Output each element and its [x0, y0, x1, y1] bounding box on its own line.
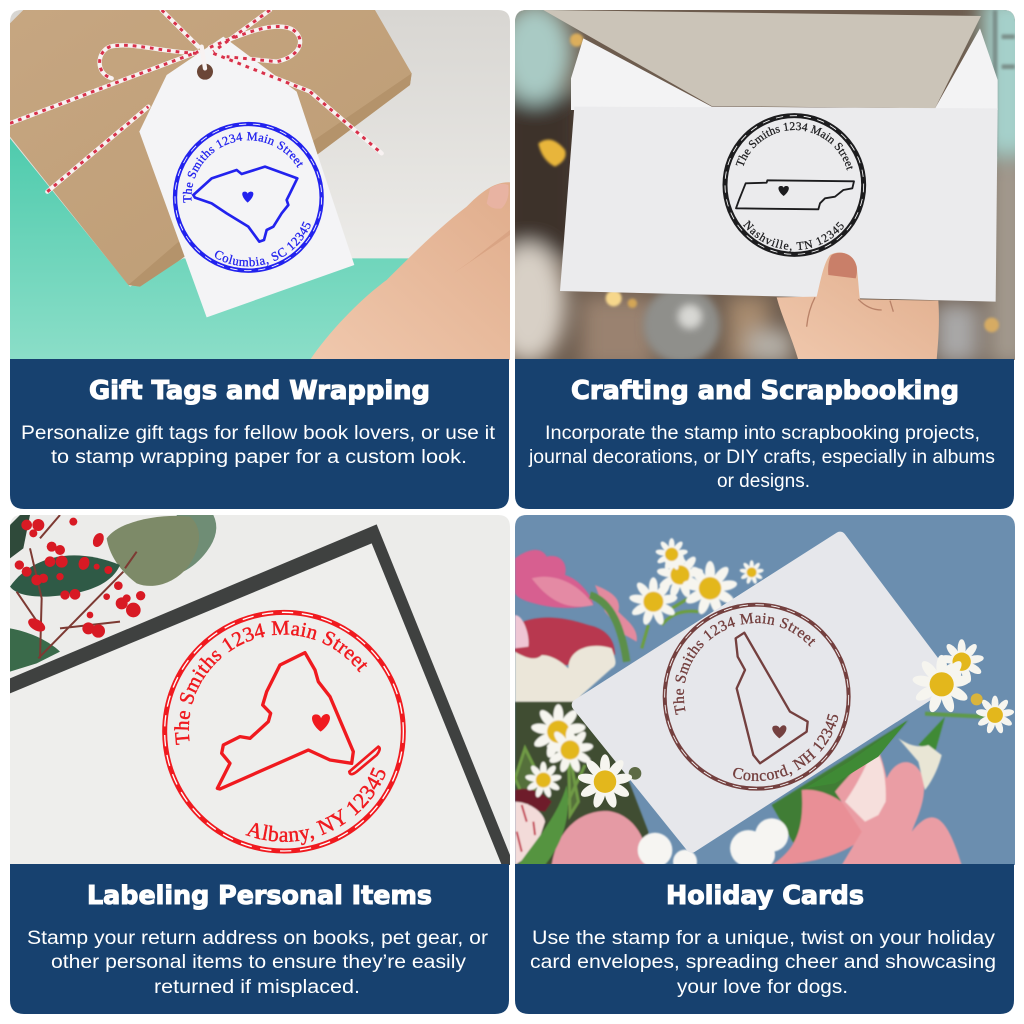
stamp: New York [162, 610, 406, 854]
photo: gift box with tag [10, 10, 510, 360]
stamp: South Carolina [172, 122, 324, 273]
caption bar [515, 359, 1014, 509]
eucalyptus and red flowers [10, 515, 216, 672]
panel: gift tags and wrapping [10, 10, 510, 509]
description: other personal items to ensure they’re easily [51, 952, 467, 973]
flowers behind card [515, 538, 992, 874]
book cover [10, 524, 510, 865]
lights [538, 10, 1015, 332]
description [27, 928, 489, 998]
daisies over card [577, 639, 1015, 809]
card [578, 538, 948, 847]
hand [777, 252, 939, 360]
panel: holiday cards [515, 515, 1015, 1014]
card hole [629, 767, 641, 780]
hand [310, 182, 510, 360]
description: your love for dogs. [677, 977, 848, 998]
stamp: Tennessee: Nashville, TN 12345 [743, 220, 844, 252]
caption bar [10, 359, 509, 509]
caption bar [10, 864, 509, 1014]
heading: Crafting and Scrapbooking [571, 376, 959, 406]
photo: card in bouquet [515, 515, 1015, 865]
heading: Holiday Cards [666, 881, 864, 911]
tag [139, 37, 354, 317]
stamp: South Carolina: The Smiths 1234 Main Street [182, 132, 303, 203]
tag hole [197, 64, 213, 80]
description: Stamp your return address on books, pet gear, or [27, 928, 489, 949]
envelope front [560, 107, 998, 302]
description [21, 423, 496, 468]
stamp: New Hampshire [662, 602, 851, 791]
stamp: Tennessee [722, 113, 866, 257]
photo: book with flowers [10, 515, 510, 865]
stamp: New York: Albany, NY 12345 [245, 767, 386, 846]
panel: labeling personal items [10, 515, 510, 1014]
stamp: South Carolina: Columbia, SC 12345 [214, 221, 311, 267]
description: journal decorations, or DIY crafts, especially in albums [528, 447, 995, 468]
heading: Labeling Personal Items [87, 881, 432, 911]
gift box [10, 10, 412, 287]
photo: envelope [515, 10, 1015, 360]
card insert [543, 10, 981, 108]
heading: Gift Tags and Wrapping [89, 376, 430, 406]
description: or designs. [717, 471, 810, 492]
description: Personalize gift tags for fellow book lovers, or use it [21, 423, 496, 444]
description [528, 423, 995, 492]
panel: crafting and scrapbooking [515, 10, 1015, 509]
envelope back flap [571, 28, 998, 110]
description: Incorporate the stamp into scrapbooking projects, [545, 423, 980, 444]
book page [10, 543, 502, 865]
twine bow [10, 10, 382, 192]
stamp: Tennessee: The Smiths 1234 Main Street [736, 122, 853, 170]
description: returned if misplaced. [154, 977, 360, 998]
description: card envelopes, spreading cheer and showcasing [530, 952, 996, 973]
stamp: New Hampshire: The Smiths 1234 Main Street [673, 612, 816, 715]
description [530, 928, 996, 998]
stamp: New York: The Smiths 1234 Main Street [174, 620, 368, 745]
bauble [643, 287, 720, 363]
stamp: New Hampshire: Concord, NH 12345 [733, 714, 838, 782]
caption bar [515, 864, 1014, 1014]
description: to stamp wrapping paper for a custom look. [51, 447, 467, 468]
description: Use the stamp for a unique, twist on your holiday [532, 928, 996, 949]
